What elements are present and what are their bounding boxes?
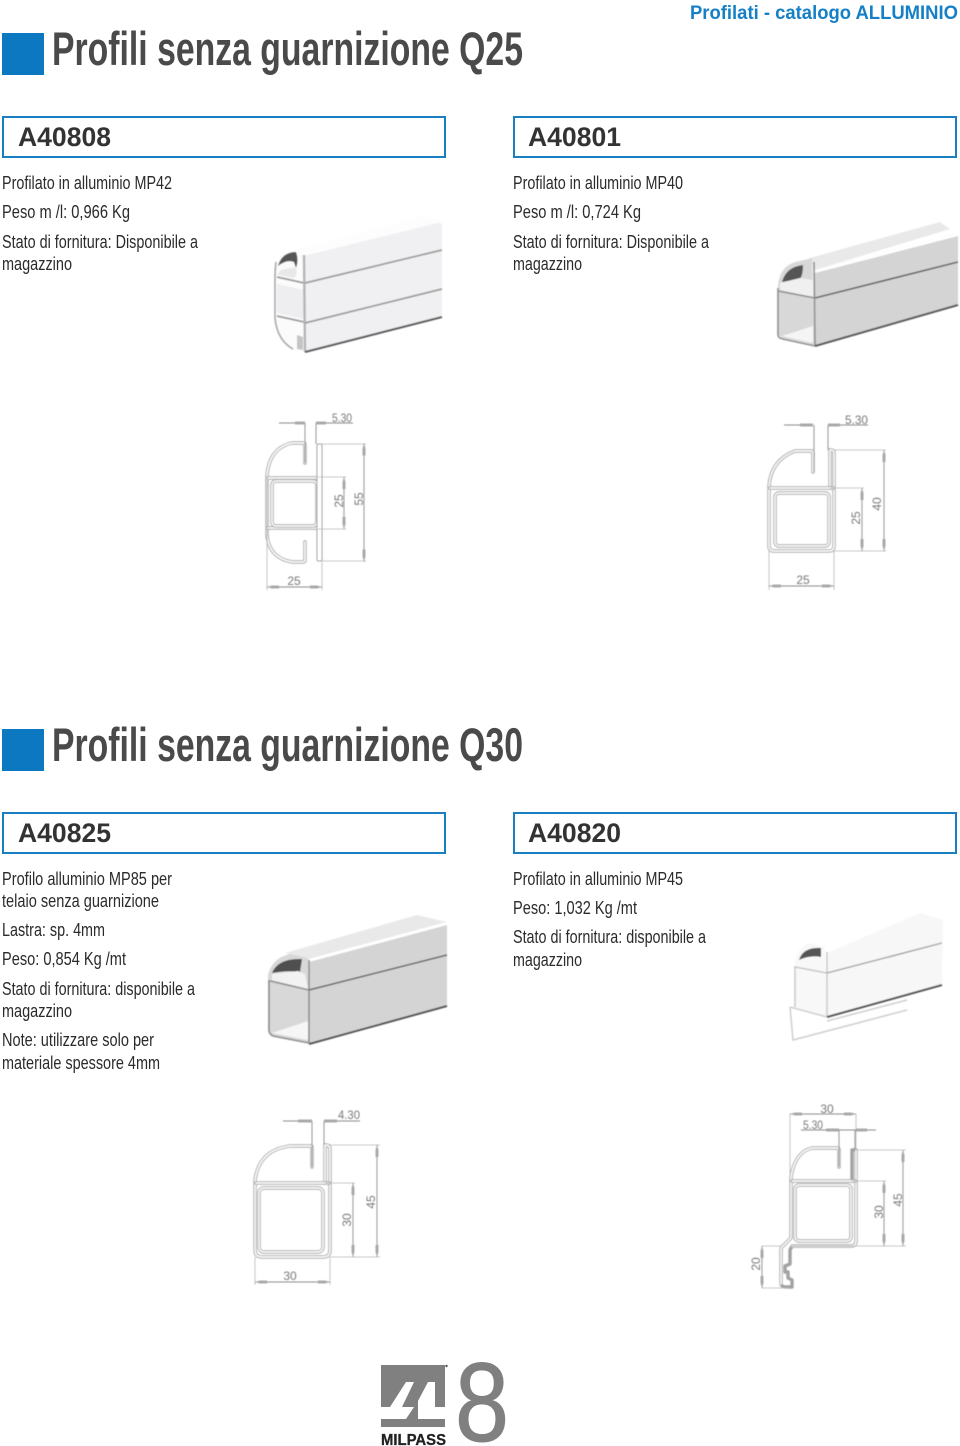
technical drawing A40801: 5.30 [845, 413, 868, 427]
description A40825: Stato di fornitura: disponibile a [2, 979, 196, 999]
catalogue header label: Profilati - catalogo ALLUMINIO [690, 3, 958, 24]
description A40808: Peso m /l: 0,966 Kg [2, 202, 130, 222]
code box A40825: A40825 [18, 818, 111, 848]
technical drawing A40808: 25 [287, 574, 301, 588]
technical drawing A40820: 20 [749, 1257, 763, 1271]
description A40820: magazzino [513, 950, 582, 970]
description A40820: Peso: 1,032 Kg /mt [513, 898, 637, 918]
technical drawing A40808: 55 [352, 492, 366, 506]
description A40825: Note: utilizzare solo per [2, 1030, 154, 1050]
description A40825: telaio senza guarnizione [2, 891, 159, 911]
technical drawing A40825: 30 [283, 1269, 297, 1283]
code box A40825 [3, 813, 445, 853]
description A40801: magazzino [513, 254, 582, 274]
description A40808: Profilato in alluminio MP42 [2, 173, 172, 193]
description A40801 [513, 173, 710, 274]
panel: A40820 [513, 813, 956, 1288]
section heading: Q25 [2, 22, 523, 75]
technical drawing A40801: 40 [870, 497, 884, 511]
3D profile A40801 [778, 222, 958, 346]
description A40820: Profilato in alluminio MP45 [513, 869, 683, 889]
technical drawing A40820: 30 [820, 1102, 834, 1116]
technical drawing A40801 [769, 413, 886, 590]
description A40825: Peso: 0,854 Kg /mt [2, 949, 126, 969]
description A40825: Profilo alluminio MP85 per [2, 869, 172, 889]
description A40808: magazzino [2, 254, 72, 274]
code box A40801: A40801 [528, 122, 621, 152]
panel: A40825 [2, 813, 447, 1285]
logo: Milpass [381, 1365, 448, 1446]
3D profile A40825 [268, 915, 447, 1044]
section heading: Q30 [2, 718, 523, 771]
description A40808: Stato di fornitura: Disponibile a [2, 232, 199, 252]
description A40801: Peso m /l: 0,724 Kg [513, 202, 641, 222]
code box A40801 [514, 117, 956, 157]
technical drawing A40825 [255, 1108, 380, 1285]
code box A40820: A40820 [528, 818, 621, 848]
description A40820 [513, 869, 707, 970]
technical drawing A40820 [749, 1102, 906, 1288]
technical drawing A40801: 25 [796, 573, 810, 587]
section heading: Q30: Profili senza guarnizione Q30 [52, 718, 523, 771]
code box A40820 [514, 813, 956, 853]
description A40825: magazzino [2, 1001, 72, 1021]
description A40808 [2, 173, 199, 274]
description A40825 [2, 869, 196, 1073]
technical drawing A40820: 45 [891, 1193, 905, 1207]
description A40820: Stato di fornitura: disponibile a [513, 927, 707, 947]
code box A40808: A40808 [18, 122, 111, 152]
3D profile A40808 [275, 216, 442, 352]
panel: A40808 [2, 117, 445, 590]
technical drawing A40808: 5.30 [332, 411, 352, 425]
panel: A40801 [513, 117, 958, 590]
technical drawing A40820: 5.30 [803, 1118, 823, 1132]
technical drawing A40820: 30 [872, 1205, 886, 1219]
code box A40808 [3, 117, 445, 157]
technical drawing A40825: 4.30 [338, 1108, 360, 1122]
technical drawing A40808 [267, 411, 366, 590]
description A40825: materiale spessore 4mm [2, 1053, 160, 1073]
technical drawing A40825: 30 [340, 1213, 354, 1227]
3D profile A40820 [790, 913, 943, 1040]
section heading: Q25: Profili senza guarnizione Q25 [52, 22, 523, 75]
technical drawing A40808: 25 [332, 494, 346, 508]
description A40801: Profilato in alluminio MP40 [513, 173, 683, 193]
technical drawing A40801: 25 [849, 511, 863, 525]
description A40825: Lastra: sp. 4mm [2, 920, 105, 940]
technical drawing A40825: 45 [364, 1195, 378, 1209]
description A40801: Stato di fornitura: Disponibile a [513, 232, 710, 252]
